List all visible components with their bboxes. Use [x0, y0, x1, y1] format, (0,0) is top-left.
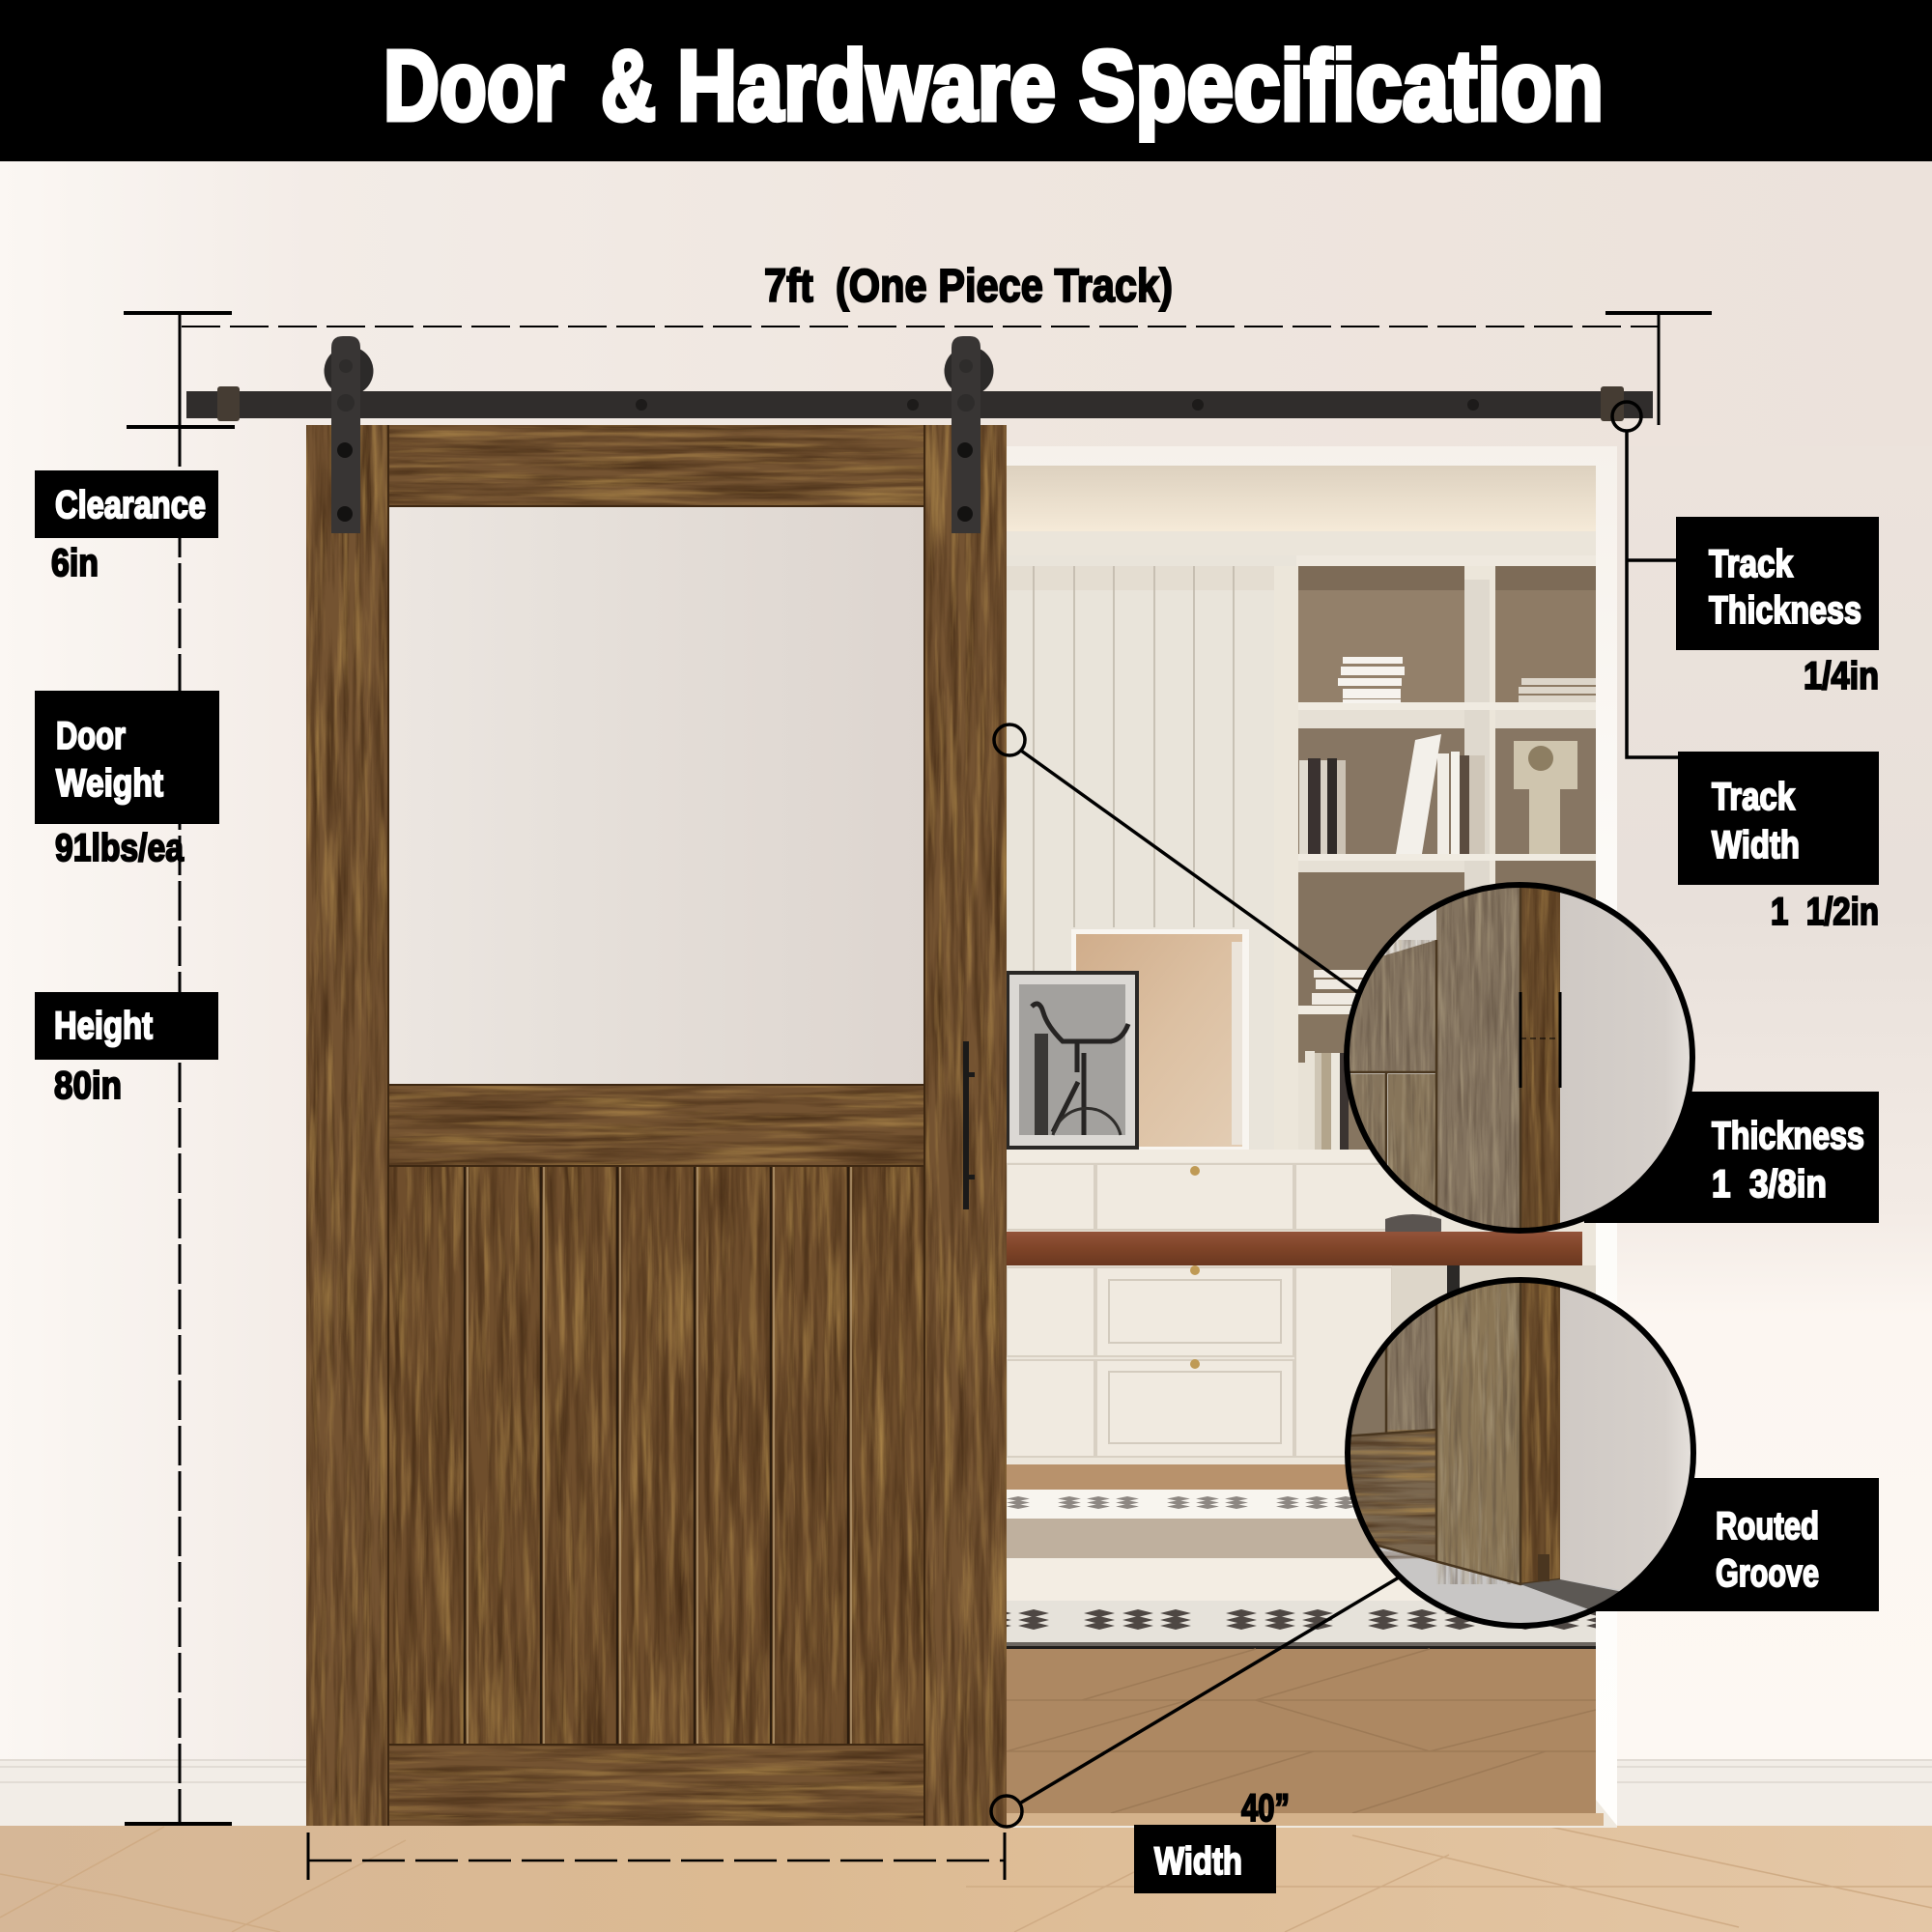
- label: routed groove: Groove: [1716, 1552, 1819, 1595]
- title bar: Hardware: [677, 30, 1056, 141]
- plank panel: [388, 1166, 924, 1745]
- value: clearance: 6in: [51, 542, 99, 584]
- plank grooves and joins: [465, 1166, 848, 1745]
- watercolour art frame: [1071, 929, 1249, 1150]
- panelled wall: [1007, 555, 1296, 1159]
- label: door width: Width: [1154, 1840, 1242, 1883]
- label: door width: [1134, 1825, 1276, 1893]
- right stile: [924, 425, 1007, 1826]
- bicycle photo frame: [1007, 971, 1139, 1150]
- label: door thickness: Thickness: [1712, 1115, 1864, 1157]
- label: door weight: Door: [56, 715, 126, 757]
- title bar: Specification: [1079, 30, 1604, 141]
- top rail: [388, 425, 924, 506]
- title bar: [0, 0, 1932, 161]
- interior wood floor: [1007, 1649, 1604, 1826]
- track length label: 7ft (One Piece Track): [764, 261, 1173, 312]
- label: track width: Track: [1712, 776, 1796, 818]
- barn door: [306, 425, 1007, 1826]
- label: height: [35, 992, 218, 1060]
- label: height: Height: [54, 1005, 153, 1047]
- crown moulding: [1007, 531, 1596, 555]
- thickness callout leader: [994, 724, 1357, 992]
- width dimension: [308, 1833, 1005, 1880]
- track length dimension: [182, 313, 1712, 425]
- value: track width: 1 1/2in: [1771, 891, 1879, 933]
- bowl: [1385, 1214, 1441, 1239]
- far floor: [1007, 1464, 1596, 1491]
- books on shelves: [1298, 657, 1596, 1150]
- cabinets: [1007, 1150, 1596, 1464]
- label: track thickness: [1676, 517, 1879, 650]
- track rail: [186, 386, 1653, 421]
- baseboards: [0, 1759, 1932, 1826]
- thickness ticks: [1520, 992, 1560, 1088]
- label: track width: Width: [1712, 824, 1800, 867]
- clearance and height dimension: [124, 313, 235, 1824]
- title bar: Door: [384, 30, 564, 141]
- label: door weight: [35, 691, 219, 824]
- label: track thickness: Thickness: [1709, 589, 1861, 632]
- room seen through doorway: [1007, 446, 1617, 1828]
- left roller hanger: [325, 336, 373, 533]
- value: door weight: 91lbs/ea: [55, 827, 185, 869]
- label: track thickness: Track: [1709, 543, 1794, 585]
- ceiling band: [1007, 466, 1596, 531]
- bookshelf: [1274, 566, 1596, 1165]
- value: door width: 40”: [1241, 1787, 1290, 1830]
- label: routed groove: Routed: [1716, 1505, 1819, 1548]
- label: door thickness: 1 3/8in: [1712, 1163, 1827, 1206]
- title bar: &: [601, 30, 656, 141]
- routed groove callout leader: [991, 1577, 1399, 1827]
- value: track thickness: 1/4in: [1804, 655, 1879, 697]
- magnifier: door thickness: [1343, 879, 1700, 1238]
- label: door weight: Weight: [56, 762, 163, 805]
- label: routed groove: [1584, 1478, 1879, 1611]
- label: clearance: [35, 470, 218, 538]
- left stile: [306, 425, 388, 1826]
- door casing: [1007, 446, 1617, 1826]
- door handle: [963, 1041, 975, 1209]
- middle rail: [388, 1085, 924, 1166]
- magnifier: routed groove: [1343, 1275, 1700, 1633]
- floor: [0, 1826, 1932, 1932]
- label: clearance: Clearance: [55, 484, 206, 526]
- label: track width: [1678, 752, 1879, 885]
- rug: [1007, 1490, 1596, 1649]
- track callout leader: [1612, 402, 1678, 757]
- desk: [1007, 1232, 1582, 1294]
- right roller hanger: [945, 336, 993, 533]
- glass panel: [388, 506, 924, 1085]
- value: height: 80in: [54, 1065, 122, 1107]
- bottom rail: [388, 1745, 924, 1826]
- label: door thickness: [1584, 1092, 1879, 1223]
